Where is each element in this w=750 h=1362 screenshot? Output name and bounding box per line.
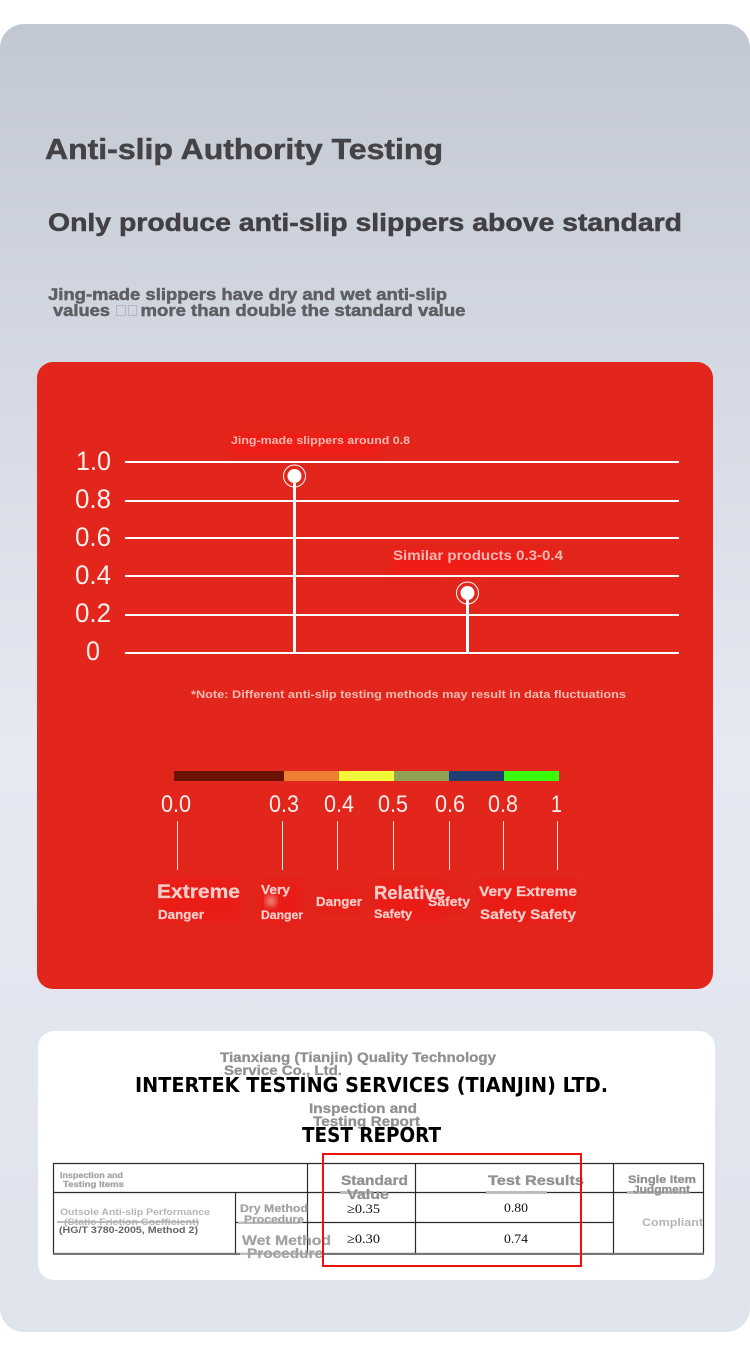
safety level labels: Danger (316, 894, 362, 909)
test item description: (Static Friction Coefficient) (64, 1217, 199, 1227)
safety level labels: Very Extreme (479, 883, 577, 899)
description line 2: more than double the standard value (140, 301, 466, 320)
marker: Jing-made slippers (284, 465, 306, 653)
axis labels (75, 446, 111, 666)
description line 1: Jing-made slippers have dry and wet anti-slip (48, 285, 447, 304)
scale values: 0.5 (378, 791, 408, 818)
report heading (302, 1100, 441, 1147)
method labels: Procedure (247, 1245, 323, 1261)
safety level labels: Very (261, 882, 291, 897)
column headers: Value (347, 1186, 389, 1202)
description line 2: values (53, 301, 110, 320)
scale values: 1 (551, 791, 562, 818)
column headers: Standard (341, 1172, 408, 1188)
test results: 0.80 (504, 1200, 528, 1215)
column headers (60, 1171, 696, 1202)
column headers: Testing Items (63, 1180, 125, 1189)
scale values: 0.3 (269, 791, 299, 818)
standard values: ≥0.35 (347, 1201, 380, 1216)
safety level labels: Danger (158, 907, 204, 922)
axis labels: 0.6 (75, 522, 111, 552)
results table (53, 1164, 704, 1261)
safety level labels (157, 879, 577, 922)
callout: Jing-made label (231, 434, 410, 454)
column headers: Inspection and (60, 1171, 123, 1180)
colour scale bar (174, 771, 559, 781)
axis labels: 0.2 (75, 598, 111, 628)
standard values (347, 1201, 380, 1246)
method labels: Dry Method (240, 1203, 308, 1215)
test item description (59, 1207, 210, 1235)
column headers: Judgment (633, 1184, 690, 1196)
scale values: 0.6 (435, 791, 465, 818)
axis labels: 0.8 (75, 484, 111, 514)
scale values: 0.0 (161, 791, 191, 818)
header text block (45, 134, 682, 320)
title: Anti-slip Authority Testing (45, 134, 443, 166)
axis labels: 0.4 (75, 560, 111, 590)
report heading: Inspection and (309, 1100, 417, 1116)
callout: similar products label: Similar products 0.3-0.4 (393, 547, 563, 563)
lab name heading (135, 1049, 608, 1097)
method labels (240, 1203, 331, 1261)
safety level labels: Safety Safety (480, 906, 576, 922)
callout: similar products label (392, 547, 563, 573)
scale values: 0.8 (488, 791, 518, 818)
chart note: *Note: Different anti-slip testing methods may result in data fluctuations (191, 689, 626, 701)
method labels: Procedure (244, 1214, 304, 1226)
report heading: TEST REPORT (302, 1123, 441, 1147)
marker: similar products (456, 582, 478, 653)
smudge (266, 896, 276, 906)
report heading: Testing Report (313, 1113, 420, 1129)
method labels: Wet Method (242, 1232, 331, 1248)
test results: 0.74 (504, 1231, 529, 1246)
column headers: Test Results (488, 1172, 584, 1188)
column headers: Single Item (628, 1174, 696, 1186)
panel: test report card (38, 1031, 715, 1280)
scale values: 0.4 (324, 791, 354, 818)
subtitle: Only produce anti-slip slippers above standard (48, 209, 682, 237)
test item description: (HG/T 3780-2005, Method 2) (59, 1225, 198, 1235)
safety level labels: Relative (374, 883, 445, 903)
safety level labels: Danger (261, 908, 303, 922)
test results (504, 1200, 529, 1246)
line chart (75, 434, 679, 666)
judgment: Compliant (642, 1217, 703, 1229)
lab name heading: Tianxiang (Tianjin) Quality Technology (220, 1049, 496, 1065)
axis labels: 0 (86, 636, 100, 666)
safety level labels: Safety (374, 907, 412, 921)
safety level labels: Extreme (157, 882, 240, 903)
lab name heading: Service Co., Ltd. (224, 1062, 342, 1078)
panel: red anti-slip chart (37, 362, 713, 989)
lab name heading: INTERTEK TESTING SERVICES (TIANJIN) LTD. (135, 1073, 608, 1097)
red highlight box (323, 1154, 581, 1266)
callout: Jing-made label: Jing-made slippers around 0.8 (231, 435, 410, 447)
scale values (161, 791, 562, 818)
safety level labels: Safety (428, 894, 471, 909)
standard values: ≥0.30 (347, 1231, 380, 1246)
test item description: Outsole Anti-slip Performance (60, 1207, 210, 1217)
axis labels: 1.0 (76, 446, 111, 476)
